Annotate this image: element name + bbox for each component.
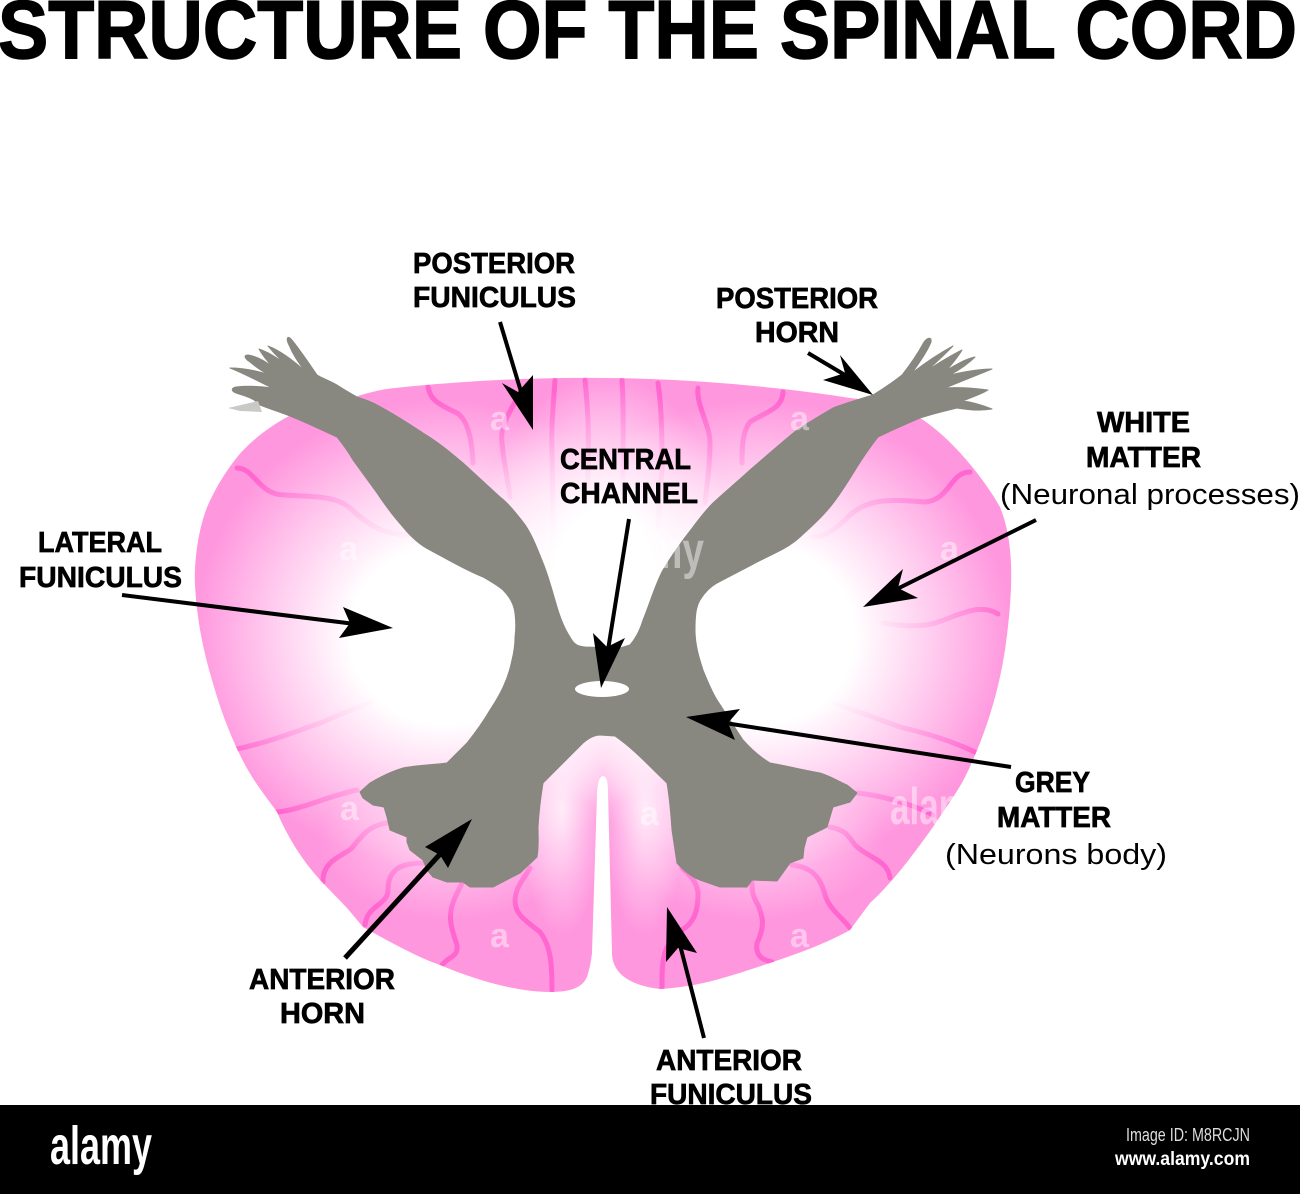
label: grey matter: (Neurons body) (945, 839, 1167, 871)
central channel (575, 681, 629, 697)
watermarks: alam (890, 778, 970, 836)
label: posterior funiculus: FUNICULUS (413, 282, 576, 314)
label: grey matter: MATTER (997, 802, 1111, 834)
label: lateral funiculus: LATERAL (38, 527, 162, 559)
label: lateral funiculus (19, 527, 182, 594)
neuronal process vessels (237, 380, 998, 990)
label: anterior funiculus: FUNICULUS (650, 1079, 812, 1111)
watermarks (339, 400, 970, 955)
label: posterior funiculus (413, 248, 576, 314)
watermarks: a (339, 530, 359, 568)
label: posterior horn: POSTERIOR (716, 283, 878, 315)
arrow: anterior horn (345, 819, 472, 958)
label: posterior horn: HORN (755, 317, 839, 349)
label: white matter: WHITE (1097, 407, 1190, 439)
label: grey matter (945, 767, 1167, 871)
label: central channel: CENTRAL (560, 444, 691, 476)
label: central channel: CHANNEL (560, 478, 698, 510)
faded finger watermark (228, 401, 262, 412)
arrow: central channel (593, 519, 629, 688)
arrow: grey matter (686, 709, 1011, 767)
label: central channel (560, 444, 698, 510)
arrow: posterior funiculus (500, 322, 533, 430)
arrow: lateral funiculus (122, 595, 393, 638)
arrow: posterior horn (808, 353, 873, 395)
label: anterior horn (249, 964, 395, 1030)
watermarks: alamy (594, 522, 704, 580)
label: white matter: MATTER (1086, 442, 1201, 474)
website: www.alamy.com (1114, 1149, 1250, 1170)
label: anterior horn: ANTERIOR (249, 964, 395, 996)
white matter body (180, 360, 1030, 1010)
label: anterior funiculus (650, 1045, 812, 1111)
label: anterior horn: HORN (280, 998, 365, 1030)
watermarks: a (790, 400, 810, 438)
watermarks: a (790, 917, 810, 955)
arrow: white matter (863, 520, 1036, 607)
label: grey matter: GREY (1015, 767, 1090, 799)
footer bar (0, 1105, 1300, 1194)
label: white matter: (Neuronal processes) (1000, 479, 1300, 511)
spinal cord cross-section (180, 337, 1030, 1010)
label: posterior horn (716, 283, 878, 349)
watermarks: a (340, 790, 360, 828)
watermarks: a (940, 530, 960, 568)
watermarks: a (490, 400, 510, 438)
label: white matter (1000, 407, 1300, 511)
watermarks: a (640, 795, 660, 833)
alamy logo: alamy (50, 1116, 152, 1176)
label: anterior funiculus: ANTERIOR (656, 1045, 802, 1077)
white glow overlays (208, 408, 618, 850)
label: posterior funiculus: POSTERIOR (413, 248, 575, 280)
watermarks: a (490, 917, 510, 955)
label: lateral funiculus: FUNICULUS (19, 562, 182, 594)
image id: Image ID: M8RCJN (1126, 1125, 1250, 1145)
arrow: anterior funiculus (666, 907, 704, 1038)
grey matter (230, 337, 992, 887)
